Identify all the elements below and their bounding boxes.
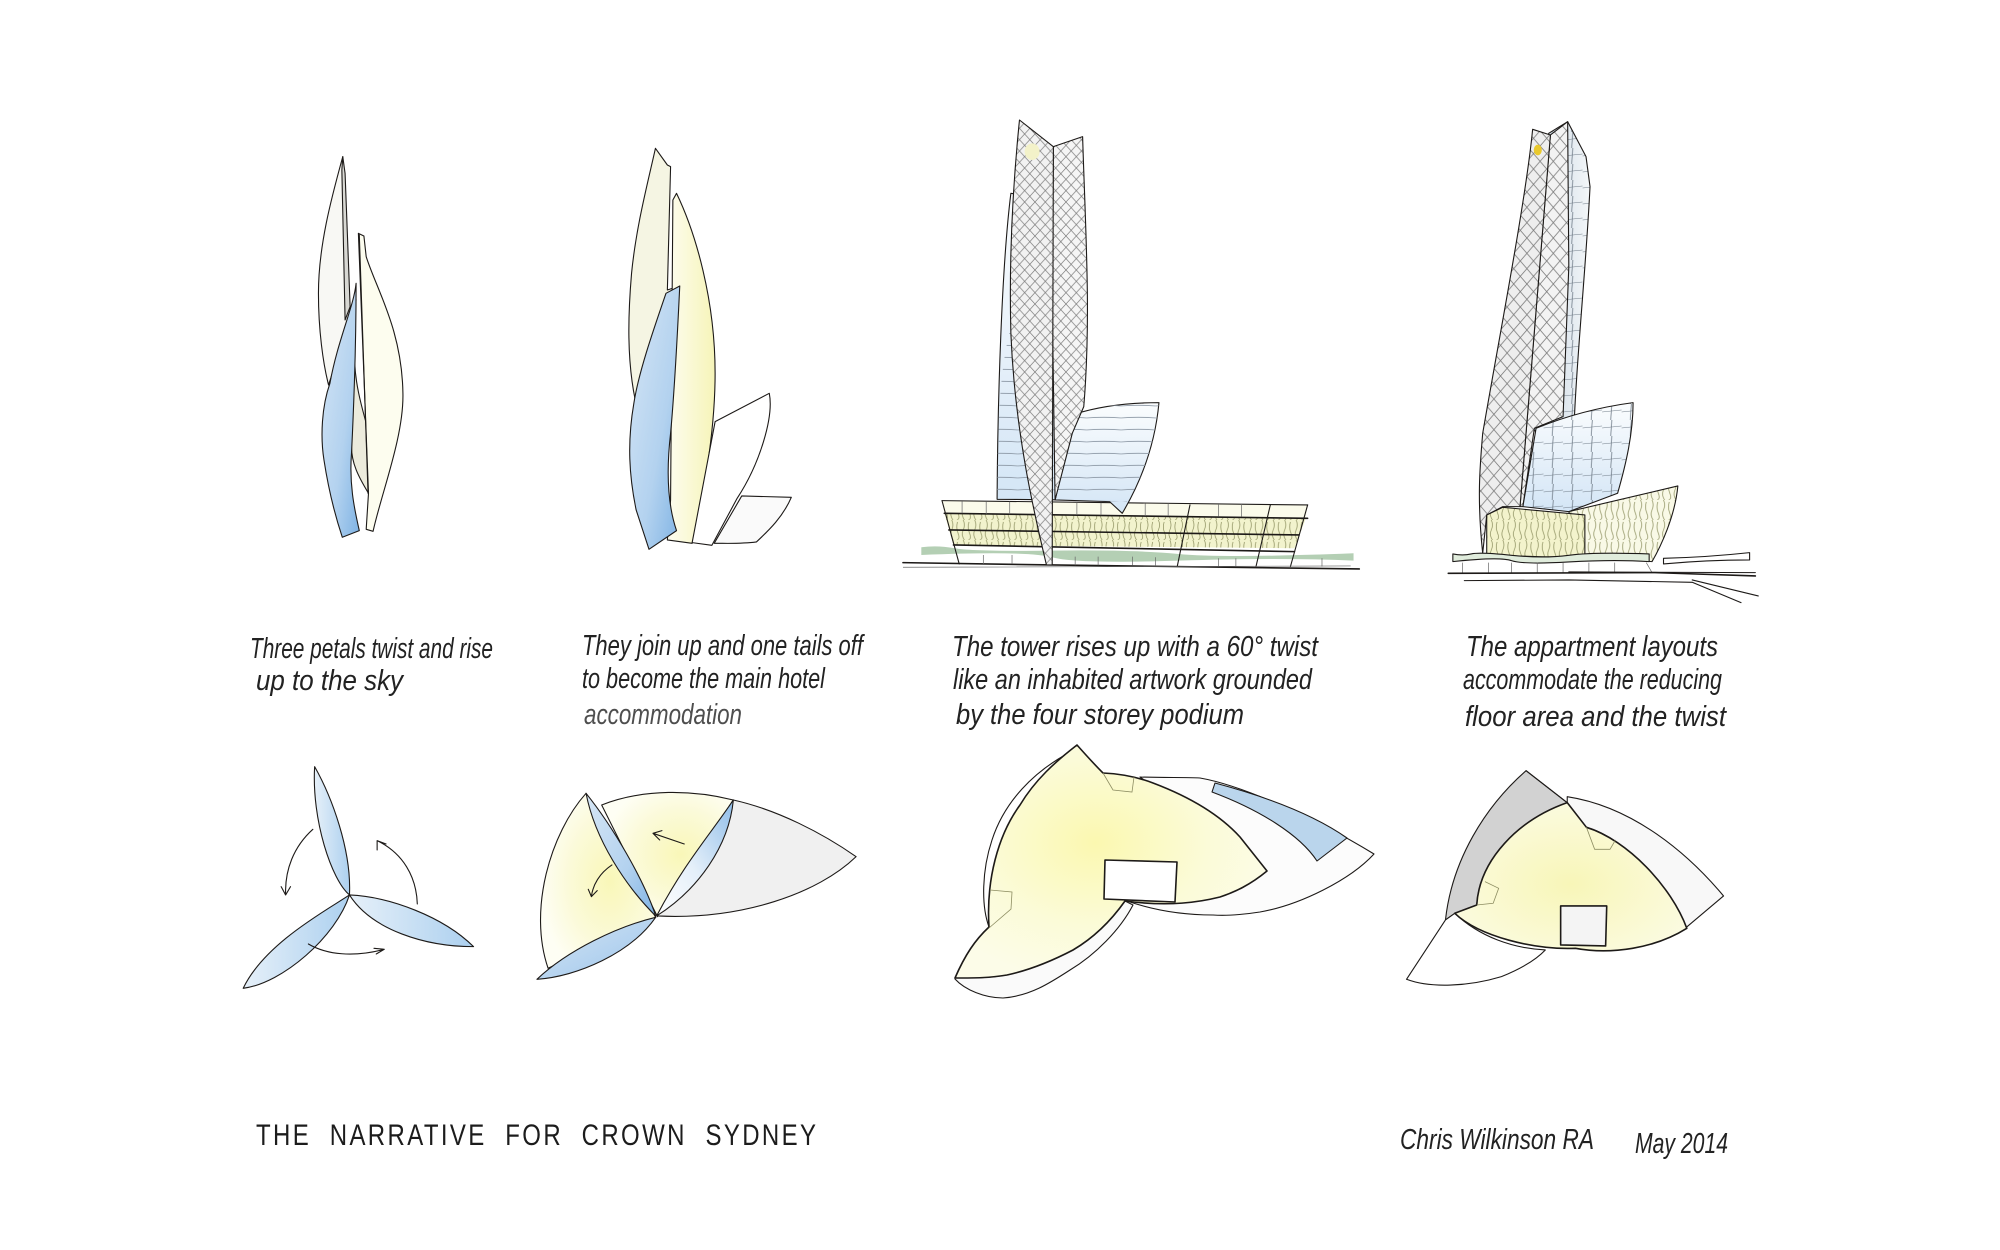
hotel block: [1523, 403, 1633, 512]
core: [1104, 860, 1177, 902]
elevation: petals join with hotel tail: [629, 148, 791, 549]
main floor plate: [1455, 803, 1687, 951]
plan: petals joined: [537, 792, 856, 979]
arrow: right: [377, 841, 417, 904]
left lattice face: [1479, 129, 1550, 553]
centre lattice face: [1520, 122, 1569, 507]
title: THE NARRATIVE FOR CROWN SYDNEY: [256, 1117, 816, 1152]
caption 2: [582, 630, 865, 731]
core: [1561, 906, 1607, 946]
caption 1: [250, 633, 493, 697]
caption 2: to become the main hotel: [582, 663, 826, 695]
podium: [903, 501, 1359, 569]
caption 4: The appartment layouts: [1466, 631, 1718, 663]
signature: Chris Wilkinson RA: [1400, 1124, 1594, 1156]
elevation: tower with podium: [903, 120, 1359, 569]
blue band: [1212, 783, 1347, 861]
caption 1: Three petals twist and rise: [250, 633, 493, 665]
right lattice petal: [1052, 137, 1087, 500]
caption 3: [952, 631, 1320, 731]
back tower face: [1529, 122, 1590, 433]
caption 3: like an inhabited artwork grounded: [953, 664, 1313, 696]
crown glow: [1025, 143, 1040, 160]
caption 4: floor area and the twist: [1465, 701, 1728, 733]
plan: apartment floor: [1407, 771, 1724, 985]
arrow: left: [281, 829, 313, 895]
plan: three petals with rotation arrows: [243, 767, 474, 988]
notches: [989, 773, 1134, 928]
caption 4: [1463, 631, 1728, 733]
hotel block: [1055, 403, 1159, 513]
plan: tower floor with hotel wing: [955, 745, 1374, 998]
arrow: bottom: [308, 944, 384, 954]
date: May 2014: [1635, 1128, 1728, 1160]
elevation: twisted tower perspective: [1448, 122, 1758, 603]
front lattice petal: [1010, 120, 1053, 565]
caption 3: The tower rises up with a 60° twist: [952, 631, 1320, 663]
main floor plate: [955, 745, 1267, 978]
caption 3: by the four storey podium: [956, 699, 1244, 731]
caption 2: They join up and one tails off: [582, 630, 865, 662]
caption 2: accommodation: [584, 699, 742, 731]
crown light: [1534, 145, 1542, 155]
back petal: [997, 193, 1069, 500]
caption 4: accommodate the reducing: [1463, 664, 1722, 696]
arrows: [588, 831, 684, 897]
notches: [1477, 827, 1615, 905]
podium: [1448, 486, 1758, 603]
elevation: three petals: [318, 157, 403, 537]
caption 1: up to the sky: [256, 665, 404, 697]
